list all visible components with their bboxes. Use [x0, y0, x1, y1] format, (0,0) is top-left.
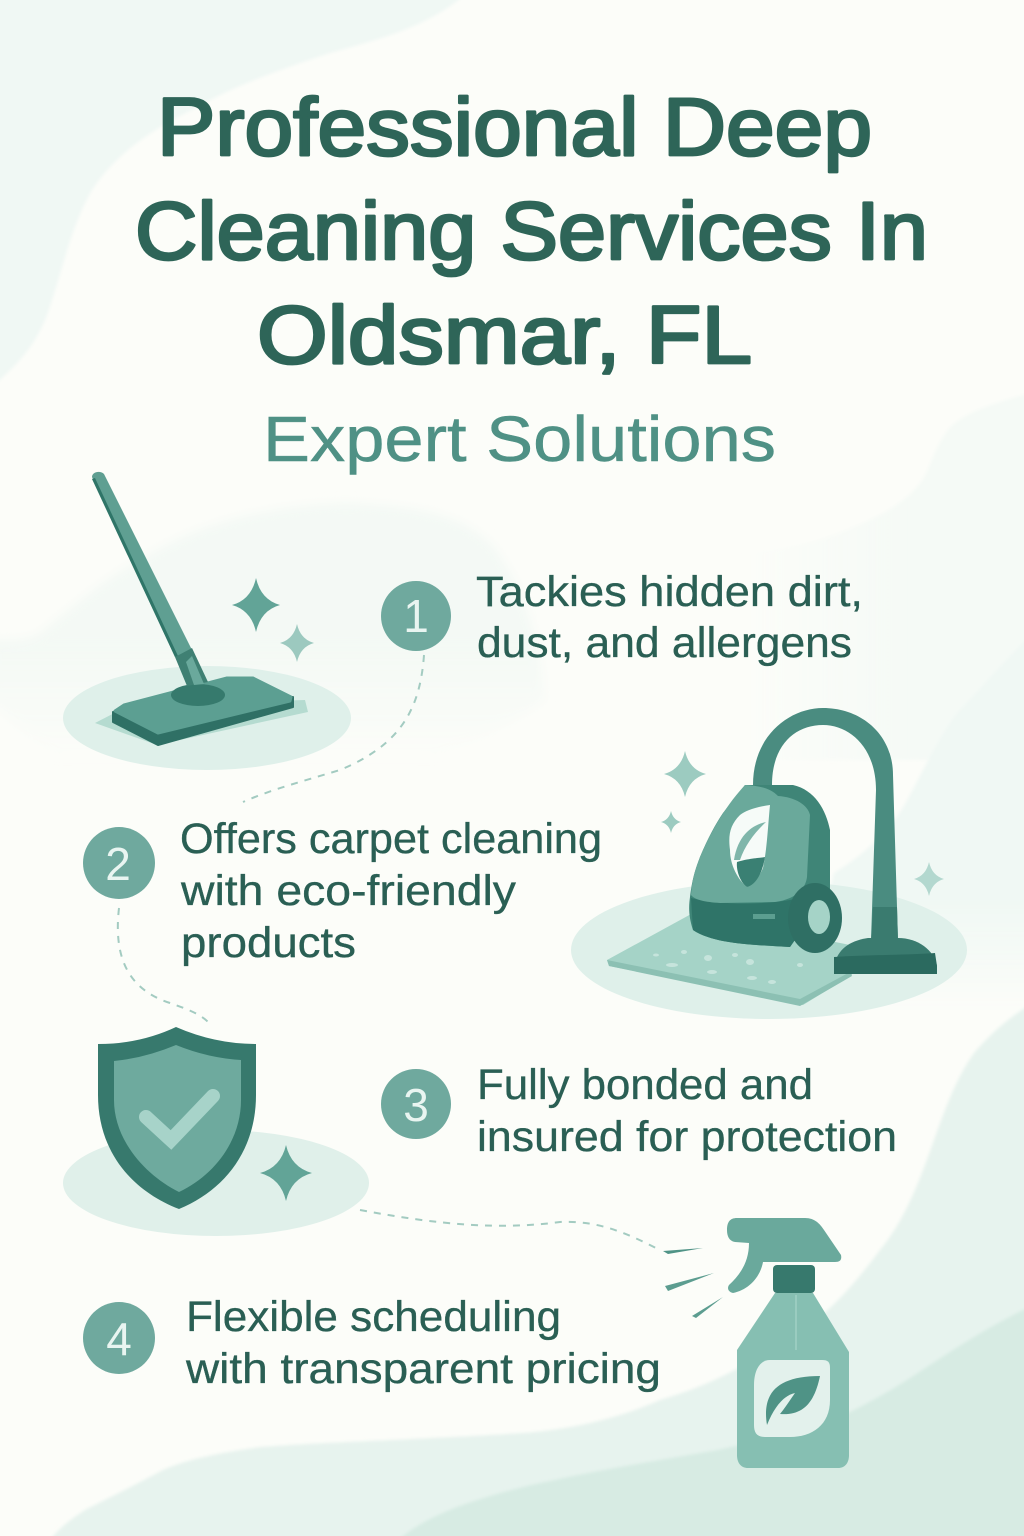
step 1 text: Tackies hidden dirt, — [476, 568, 863, 616]
title: Oldsmar, FL — [257, 290, 752, 381]
icon: shield — [63, 1027, 369, 1236]
step 1 text: dust, and allergens — [477, 619, 852, 667]
step 4 badge: 4 — [106, 1313, 132, 1365]
step 3 text: insured for protection — [477, 1113, 897, 1161]
icon: vacuum cleaner — [571, 708, 967, 1019]
step 2 text: Offers carpet cleaning — [180, 815, 602, 863]
step 2 text — [180, 815, 602, 967]
connector: step 3 to step 4 — [360, 1210, 660, 1250]
step 2 badge — [83, 827, 155, 899]
step 3 badge: 3 — [403, 1079, 429, 1131]
step 4 text: Flexible scheduling — [186, 1293, 561, 1341]
connector: step 2 to step 3 — [118, 908, 210, 1024]
step 1 text — [476, 568, 863, 667]
step 2 text: products — [181, 919, 356, 967]
step 2 badge: 2 — [105, 838, 131, 890]
title: Professional Deep — [157, 82, 872, 173]
step 4 text: with transparent pricing — [185, 1345, 661, 1393]
step 2 text: with eco-friendly — [180, 867, 517, 915]
step 4 badge — [83, 1302, 155, 1374]
icon: mop — [63, 472, 351, 770]
step 3 badge — [381, 1069, 451, 1139]
step 1 badge: 1 — [403, 590, 429, 642]
subtitle: Expert Solutions — [263, 403, 776, 475]
title: Cleaning Services In — [135, 186, 928, 277]
icon: spray bottle — [663, 1218, 849, 1468]
step 3 text — [477, 1061, 897, 1161]
step 1 badge — [381, 581, 451, 651]
title — [135, 82, 928, 381]
connector: step 1 to step 2 — [243, 655, 424, 802]
step 3 text: Fully bonded and — [477, 1061, 813, 1109]
step 4 text — [185, 1293, 661, 1393]
